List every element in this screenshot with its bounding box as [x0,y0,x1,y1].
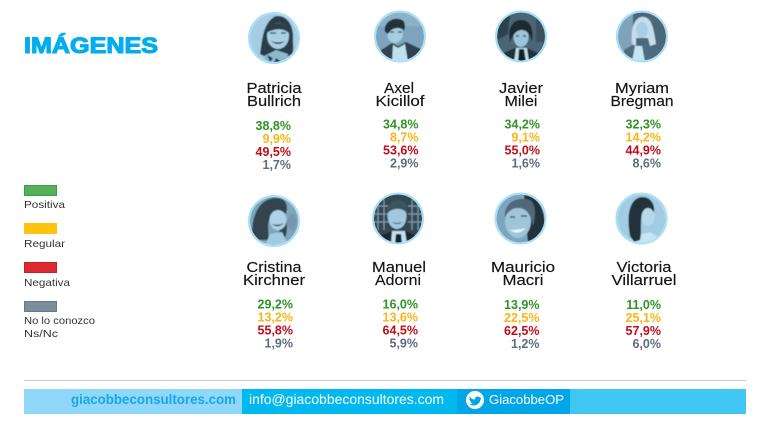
portrait: Myriam Bregman [617,12,667,62]
portrait: Mauricio Macri [496,194,544,242]
footer bar [24,389,746,414]
panel: Victoria Villarruel [612,194,676,351]
panel: Patricia Bullrich: 9,9% [262,132,291,146]
panel: Patricia Bullrich: Patricia [246,81,303,97]
panel: Myriam Bregman: 44,9% [626,144,661,158]
legend item: positiva: Positiva [24,199,65,211]
panel: Javier Milei: 55,0% [505,144,540,158]
footer: twitter [457,389,570,414]
panel: Cristina Kirchner: 13,2% [258,310,293,324]
panel: Manuel Adorni: Manuel [372,260,426,276]
portrait: Cristina Kirchner [250,197,298,245]
panel: Mauricio Macri: 1,2% [511,337,540,351]
footer: email [242,389,457,414]
footer: website: giacobbeconsultores.com [71,392,236,407]
portrait: Manuel Adorni [373,194,423,244]
portrait: Axel Kicillof [375,12,426,62]
panel: Manuel Adorni: Adorni [375,273,421,289]
panel: Myriam Bregman: 14,2% [626,130,661,144]
panel: Javier Milei: 1,6% [512,156,540,170]
panel: Javier Milei [496,12,546,170]
panel: Axel Kicillof [375,12,426,170]
legend item: no lo conozco: Ns/Nc [24,328,58,340]
panel: Cristina Kirchner [243,195,305,350]
panel: Cristina Kirchner: 55,8% [258,324,293,338]
panel: Myriam Bregman: Bregman [610,94,674,110]
panel: Cristina Kirchner: 29,2% [258,298,293,312]
panel: Javier Milei: 34,2% [505,118,540,132]
panel: Victoria Villarruel: 11,0% [626,298,661,312]
legend item: regular [24,223,66,250]
panel: Patricia Bullrich: 38,8% [256,119,291,133]
panel: Javier Milei: Milei [504,94,538,110]
panel: Victoria Villarruel: 57,9% [626,324,661,338]
panel: Mauricio Macri: Mauricio [491,260,555,276]
panel: Cristina Kirchner: Kirchner [243,273,305,289]
panel: Manuel Adorni: 16,0% [383,298,418,312]
title: IMÁGENES [24,33,158,58]
portrait: Javier Milei [496,12,546,62]
panel: Axel Kicillof: Axel [384,81,414,97]
panel: Javier Milei: Javier [499,81,543,97]
panel: Manuel Adorni [372,194,426,350]
panel: Myriam Bregman [610,12,674,170]
legend item: regular: Regular [24,238,66,250]
panel: Mauricio Macri [491,194,555,351]
portrait: Patricia Bullrich [250,14,298,62]
legend [24,186,95,340]
legend item: no lo conozco [24,302,95,340]
icon: twitter bird [466,391,484,409]
panel: Manuel Adorni: 64,5% [383,324,418,338]
panel: Victoria Villarruel: 6,0% [632,337,661,351]
panel: Mauricio Macri: Macri [502,273,544,289]
legend item: positiva [24,186,65,211]
panel: Axel Kicillof: Kicillof [376,94,426,110]
panel: Myriam Bregman: 32,3% [626,118,661,132]
panel: Victoria Villarruel: 25,1% [626,311,661,325]
panel: Axel Kicillof: 53,6% [383,144,418,158]
panel: Manuel Adorni: 13,6% [383,310,418,324]
panel: Axel Kicillof: 2,9% [390,156,418,170]
panel: Javier Milei: 9,1% [512,130,540,144]
legend item: negativa [24,262,70,289]
legend item: negativa: Negativa [24,277,70,289]
footer: twitter: GiacobbeOP [489,392,564,407]
panel: Cristina Kirchner: Cristina [246,260,303,276]
legend item: no lo conozco: No lo conozco [24,315,95,327]
panel: Mauricio Macri: 62,5% [504,324,540,338]
panel: Axel Kicillof: 8,7% [390,130,418,144]
panel: Mauricio Macri: 13,9% [504,298,540,312]
panel: Victoria Villarruel: Victoria [616,260,673,276]
panel: Axel Kicillof: 34,8% [383,118,418,132]
panel: Cristina Kirchner: 1,9% [264,336,293,350]
portrait: Victoria Villarruel [618,194,666,242]
panel: Patricia Bullrich [246,12,303,172]
footer: email: info@giacobbeconsultores.com [249,392,444,407]
panel: Patricia Bullrich: 49,5% [256,145,291,159]
panel: Victoria Villarruel: Villarruel [612,273,676,289]
panel: Mauricio Macri: 22,5% [504,311,540,325]
panel: Patricia Bullrich: Bullrich [247,94,301,110]
panel: Patricia Bullrich: 1,7% [262,158,291,172]
panel: Myriam Bregman: 8,6% [632,156,661,170]
panel: Manuel Adorni: 5,9% [390,336,418,350]
footer: website [24,389,242,414]
panel: Myriam Bregman: Myriam [615,81,669,97]
